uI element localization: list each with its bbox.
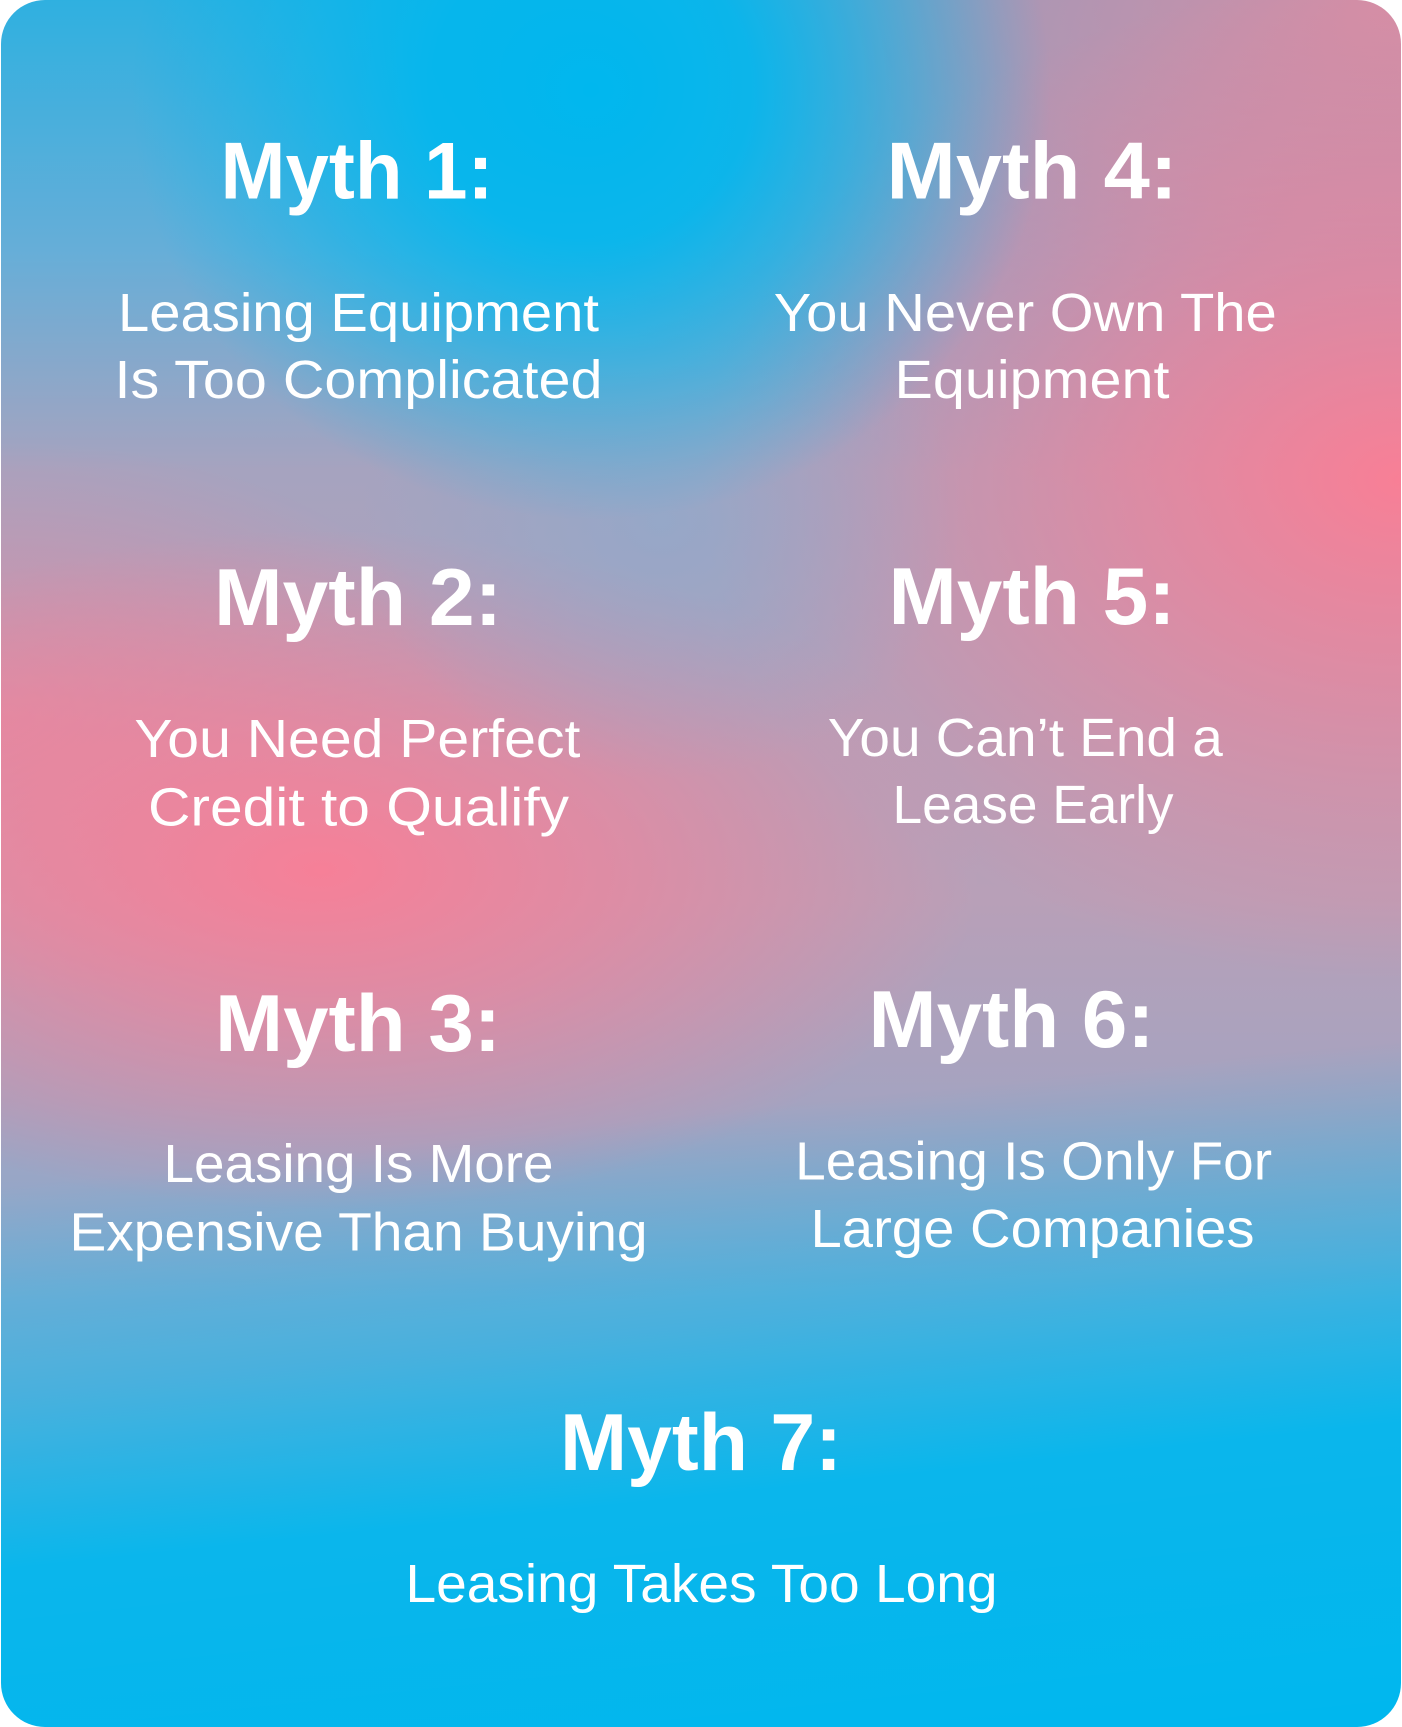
description: myth 5 [828, 708, 1224, 835]
heading: Myth 7: Myth 7: [560, 1398, 842, 1488]
heading: Myth 2: Myth 2: [214, 553, 502, 643]
description: myth 6: Leasing Is Only For [795, 1132, 1272, 1192]
description: myth 7: Leasing Takes Too Long [406, 1554, 998, 1614]
myth 5 block [828, 552, 1224, 835]
description: myth 2: Credit to Qualify [148, 777, 569, 837]
description: myth 4: Equipment [894, 350, 1170, 410]
description: myth 2 [134, 709, 580, 837]
heading: Myth 3: Myth 3: [215, 979, 501, 1069]
description: myth 2: You Need Perfect [134, 709, 580, 769]
heading: Myth 4: Myth 4: [886, 126, 1178, 216]
heading: Myth 5: Myth 5: [888, 552, 1176, 642]
description: myth 6 [795, 1132, 1272, 1259]
myth 6 block [795, 975, 1272, 1259]
description: myth 5: You Can’t End a [828, 708, 1224, 768]
description: myth 3: Leasing Is More [164, 1134, 554, 1194]
myth 4 block [774, 126, 1277, 410]
description: myth 3: Expensive Than Buying [70, 1202, 648, 1262]
heading: Myth 6: Myth 6: [868, 975, 1154, 1065]
description: myth 4 [774, 283, 1277, 410]
description: myth 3 [70, 1134, 648, 1262]
description: myth 1 [114, 283, 602, 410]
description: myth 4: You Never Own The [774, 283, 1277, 343]
myth 3 block [70, 979, 648, 1262]
description: myth 5: Lease Early [892, 775, 1174, 835]
myth 2 block [134, 553, 580, 837]
description: myth 6: Large Companies [810, 1199, 1254, 1259]
heading: Myth 1: Myth 1: [220, 126, 494, 216]
description: myth 1: Is Too Complicated [114, 350, 602, 410]
myth 7 block [406, 1398, 998, 1614]
myth 1 block [114, 126, 602, 410]
description: myth 1: Leasing Equipment [118, 283, 599, 343]
